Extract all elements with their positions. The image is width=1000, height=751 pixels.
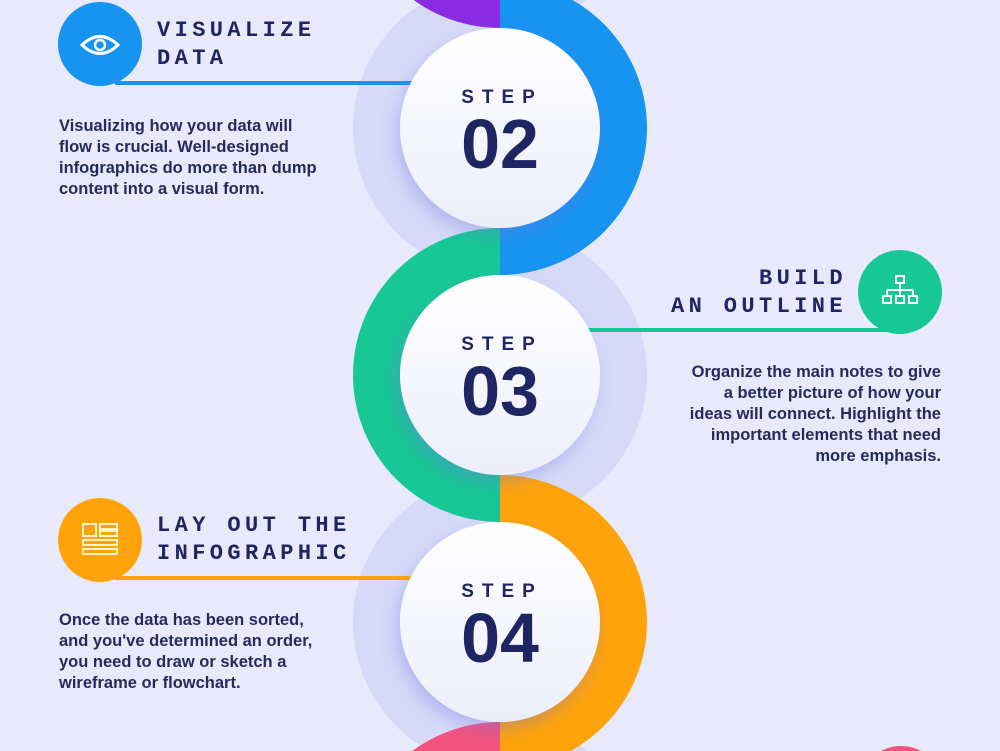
text: step 02 body: infographics do more than dump bbox=[59, 159, 317, 177]
step 02 circle bbox=[400, 28, 600, 228]
text: step 03 body: ideas will connect. Highlight the bbox=[690, 405, 941, 423]
title: build an outline: AN OUTLINE bbox=[671, 294, 847, 319]
step 02 circle: STEP bbox=[461, 87, 543, 108]
step 04 circle bbox=[400, 522, 600, 722]
title: lay out the infographic: INFOGRAPHIC bbox=[157, 541, 351, 566]
icon: eye bbox=[58, 2, 142, 86]
step 04 circle: 04 bbox=[461, 599, 539, 677]
connector line step 02 bbox=[115, 81, 415, 85]
background lavender rings bbox=[353, 0, 647, 751]
text: step 02 body: flow is crucial. Well-designed bbox=[59, 138, 289, 156]
title: visualize data: DATA bbox=[157, 46, 227, 71]
text: step 04 body: Once the data has been sorted, bbox=[59, 611, 304, 629]
title: lay out the infographic bbox=[157, 513, 351, 566]
arc: step 02 blue bbox=[500, 0, 647, 275]
text: step 03 body bbox=[690, 363, 942, 465]
connector line step 04 bbox=[115, 576, 415, 580]
text: step 04 body: wireframe or flowchart. bbox=[58, 674, 241, 692]
title: visualize data: VISUALIZE bbox=[157, 18, 315, 43]
text: step 02 body: content into a visual form. bbox=[59, 180, 264, 198]
step 03 circle: STEP bbox=[461, 334, 543, 355]
text: step 03 body: important elements that need bbox=[711, 426, 941, 444]
icon: step 05 pink circle bbox=[859, 746, 943, 751]
step 03 circle: 03 bbox=[461, 352, 539, 430]
text: step 02 body: Visualizing how your data will bbox=[59, 117, 292, 135]
title: build an outline: BUILD bbox=[759, 266, 847, 291]
text: step 04 body: you need to draw or sketch a bbox=[59, 653, 287, 671]
connector line step 03 bbox=[588, 328, 888, 332]
text: step 03 body: more emphasis. bbox=[815, 447, 941, 465]
arc: step 01 purple bbox=[353, 0, 500, 28]
title: lay out the infographic: LAY OUT THE bbox=[157, 513, 351, 538]
text: step 03 body: Organize the main notes to give bbox=[692, 363, 941, 381]
title: build an outline bbox=[671, 266, 847, 319]
text: step 03 body: a better picture of how your bbox=[724, 384, 942, 402]
arc: step 05 pink bbox=[353, 722, 500, 751]
arc: step 03 green bbox=[353, 228, 500, 522]
text: step 02 body bbox=[59, 117, 317, 198]
step 03 circle bbox=[400, 275, 600, 475]
icon: hierarchy bbox=[858, 250, 942, 334]
step 04 circle: STEP bbox=[461, 581, 543, 602]
text: step 04 body bbox=[58, 611, 312, 692]
text: step 04 body: and you've determined an order, bbox=[59, 632, 312, 650]
step 02 circle: 02 bbox=[461, 105, 539, 183]
icon: layout bbox=[58, 498, 142, 582]
arc: step 04 orange bbox=[500, 475, 647, 751]
title: visualize data bbox=[157, 18, 315, 71]
